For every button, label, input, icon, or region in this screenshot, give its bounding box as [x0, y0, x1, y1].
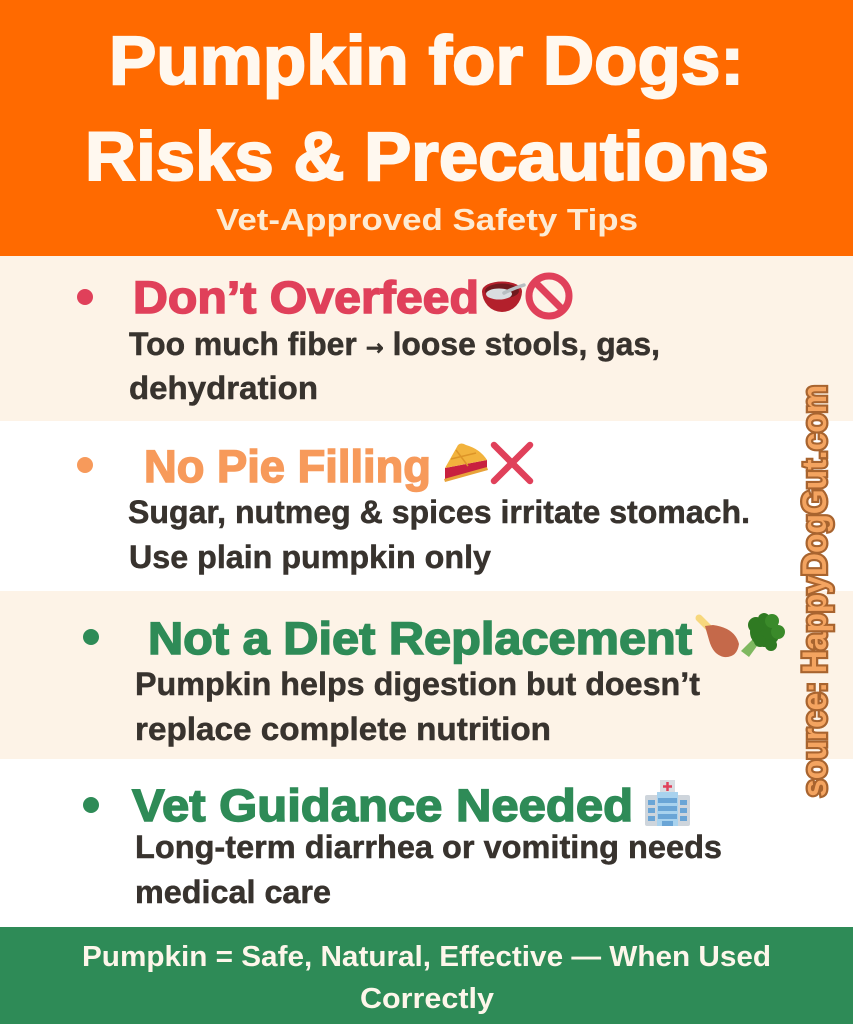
bullet	[83, 797, 99, 813]
panel: not a diet replacement	[0, 591, 853, 759]
icon: broccoli	[741, 613, 785, 657]
heading: Don’t Overfeed	[133, 272, 479, 323]
heading: Vet Guidance Needed	[132, 780, 633, 831]
body text	[135, 666, 700, 747]
subtitle: Vet-Approved Safety Tips	[216, 202, 638, 237]
footer text: Pumpkin = Safe, Natural, Effective — When Used	[82, 941, 771, 973]
icon: hospital	[645, 780, 690, 826]
panel: don't overfeed	[0, 256, 853, 421]
heading: Not a Diet Replacement	[148, 613, 692, 664]
icon: drumstick	[699, 618, 739, 657]
bullet	[77, 289, 93, 305]
title	[85, 22, 769, 195]
body text: Sugar, nutmeg & spices irritate stomach.	[128, 494, 750, 530]
body text	[135, 829, 722, 910]
panel: header	[0, 0, 853, 256]
body text	[129, 326, 660, 406]
body text	[128, 494, 750, 575]
footer text: Correctly	[360, 983, 494, 1015]
bullet	[77, 457, 93, 473]
title: Risks & Precautions	[85, 118, 769, 195]
body text: replace complete nutrition	[135, 711, 551, 747]
panel: vet guidance needed	[0, 759, 853, 927]
icon: prohibited	[529, 276, 569, 316]
bullet	[83, 629, 99, 645]
icon: bowl with spoon	[482, 282, 524, 312]
heading: No Pie Filling	[144, 441, 431, 492]
body text: Pumpkin helps digestion but doesn’t	[135, 666, 700, 702]
body text: medical care	[135, 874, 331, 910]
body text: dehydration	[129, 370, 318, 406]
source watermark: source: HappyDogGut.com	[796, 385, 834, 797]
panel: no pie filling	[0, 421, 853, 591]
title: Pumpkin for Dogs:	[109, 22, 744, 99]
footer text	[82, 941, 771, 1015]
body text: Use plain pumpkin only	[129, 539, 491, 575]
icon: pie slice	[444, 444, 488, 482]
body text: Long-term diarrhea or vomiting needs	[135, 829, 722, 865]
body text: Too much fiber → loose stools, gas,	[129, 326, 660, 362]
icon: cross mark	[494, 445, 530, 481]
panel: footer	[0, 927, 853, 1024]
